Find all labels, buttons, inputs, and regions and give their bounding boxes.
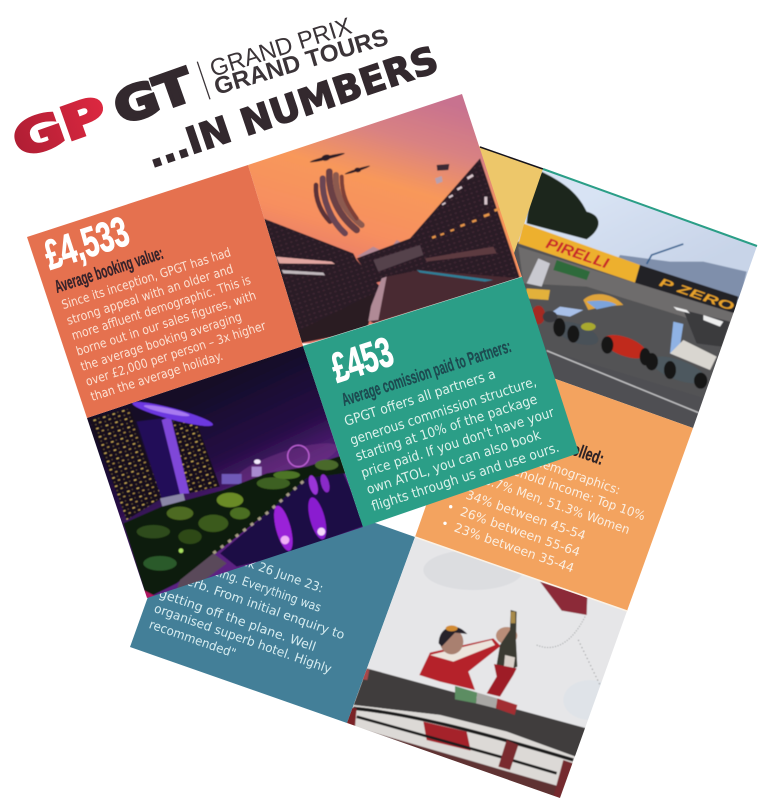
- text: booking value body: borne out in our sales figures, with: [74, 287, 258, 359]
- black top edge: [480, 147, 543, 169]
- text: booking value body: over £2,000 per person – 3x higher: [84, 317, 268, 389]
- heading: average booking value: Average booking value:: [52, 243, 166, 297]
- text: booking value body: the average booking averaging: [79, 309, 243, 374]
- photo: driver spraying champagne on podium: [347, 537, 627, 798]
- text: demographics list: Customer demographics:: [476, 434, 623, 497]
- panel: front page: [27, 83, 579, 617]
- text: testimonial: superb. From initial enquiry to: [164, 566, 347, 642]
- logo mark: GP: GP: [6, 85, 114, 168]
- panel: average booking value: [27, 165, 303, 418]
- logo: GPGT Grand Prix Grand Tours: [6, 13, 391, 168]
- text: commission body: GPGT offers all partners a: [342, 366, 498, 430]
- heading: travellers polled: Travellers polled:: [506, 417, 607, 469]
- text: demographics list: 34% between 45-54: [464, 487, 588, 543]
- text: commission body: [342, 366, 561, 515]
- text: commission body: price paid. If you don't have your: [359, 404, 557, 482]
- stat: £453: £453: [325, 328, 399, 392]
- text: commission body: starting at 10% of the package: [354, 391, 539, 465]
- pale edge above teal panel: [303, 277, 522, 346]
- text: commission body: flights through us and use ours.: [370, 440, 561, 515]
- text: booking value body: Since its inception, GPGT has had: [60, 244, 233, 312]
- text: demographics list: 23% between 35-44: [452, 520, 576, 575]
- text: testimonial: amazing. Everything was: [190, 556, 323, 615]
- cream divider: [415, 537, 627, 611]
- photo: Yas Marina circuit at sunset with aerobatic planes: [248, 94, 522, 344]
- text: demographics list: Household income: Top 10%: [483, 453, 648, 523]
- text: booking value body: than the average holiday.: [89, 348, 225, 404]
- heading: average commission paid to partners: Average comission paid to Partners:: [339, 336, 514, 410]
- green top edge: [543, 169, 757, 246]
- panel: travellers polled: [415, 352, 693, 611]
- logo mark: GT: GT: [107, 58, 201, 135]
- logo wordmark: Grand Tours: GRAND TOURS: [211, 24, 391, 101]
- text: booking value body: strong appeal with an older and: [65, 261, 235, 328]
- text: demographics list: 26% between 55-64: [458, 504, 582, 559]
- text: testimonial: [147, 549, 347, 677]
- panel: back page: [130, 133, 768, 809]
- panel: average commission: [303, 277, 579, 527]
- text: testimonial: Jack 26 June 23:: [229, 549, 326, 596]
- text: demographics list: [443, 434, 648, 575]
- logo divider: [197, 62, 210, 99]
- text: booking value body: [60, 244, 268, 404]
- photo: race start at Paul Ricard: [514, 169, 757, 428]
- text: testimonial: organised superb hotel. Highly: [152, 600, 334, 677]
- text: demographics list: 48.7% Men, 51.3% Women: [475, 470, 632, 537]
- photo: Marina Bay Singapore at night: [87, 346, 363, 598]
- logo wordmark: Grand Prix: GRAND PRIX: [207, 13, 355, 83]
- text: commission body: own ATOL, you can also book: [365, 427, 543, 498]
- text: commission body: generous commission structure,: [348, 374, 539, 449]
- title: in numbers: ...IN NUMBERS: [141, 38, 443, 177]
- text: booking value body: more affluent demographic. This is: [70, 272, 252, 343]
- panel: customer testimonial: [130, 460, 415, 723]
- text: testimonial: recommended": [147, 616, 238, 661]
- photo: race start at Paul Ricard: P ZERO: [657, 275, 737, 314]
- panel: yellow corner: [430, 143, 543, 300]
- stat: £4,533: £4,533: [38, 207, 135, 279]
- text: testimonial: getting off the plane. Well: [157, 585, 318, 654]
- photo: race start at Paul Ricard: PIRELLI: [544, 236, 611, 273]
